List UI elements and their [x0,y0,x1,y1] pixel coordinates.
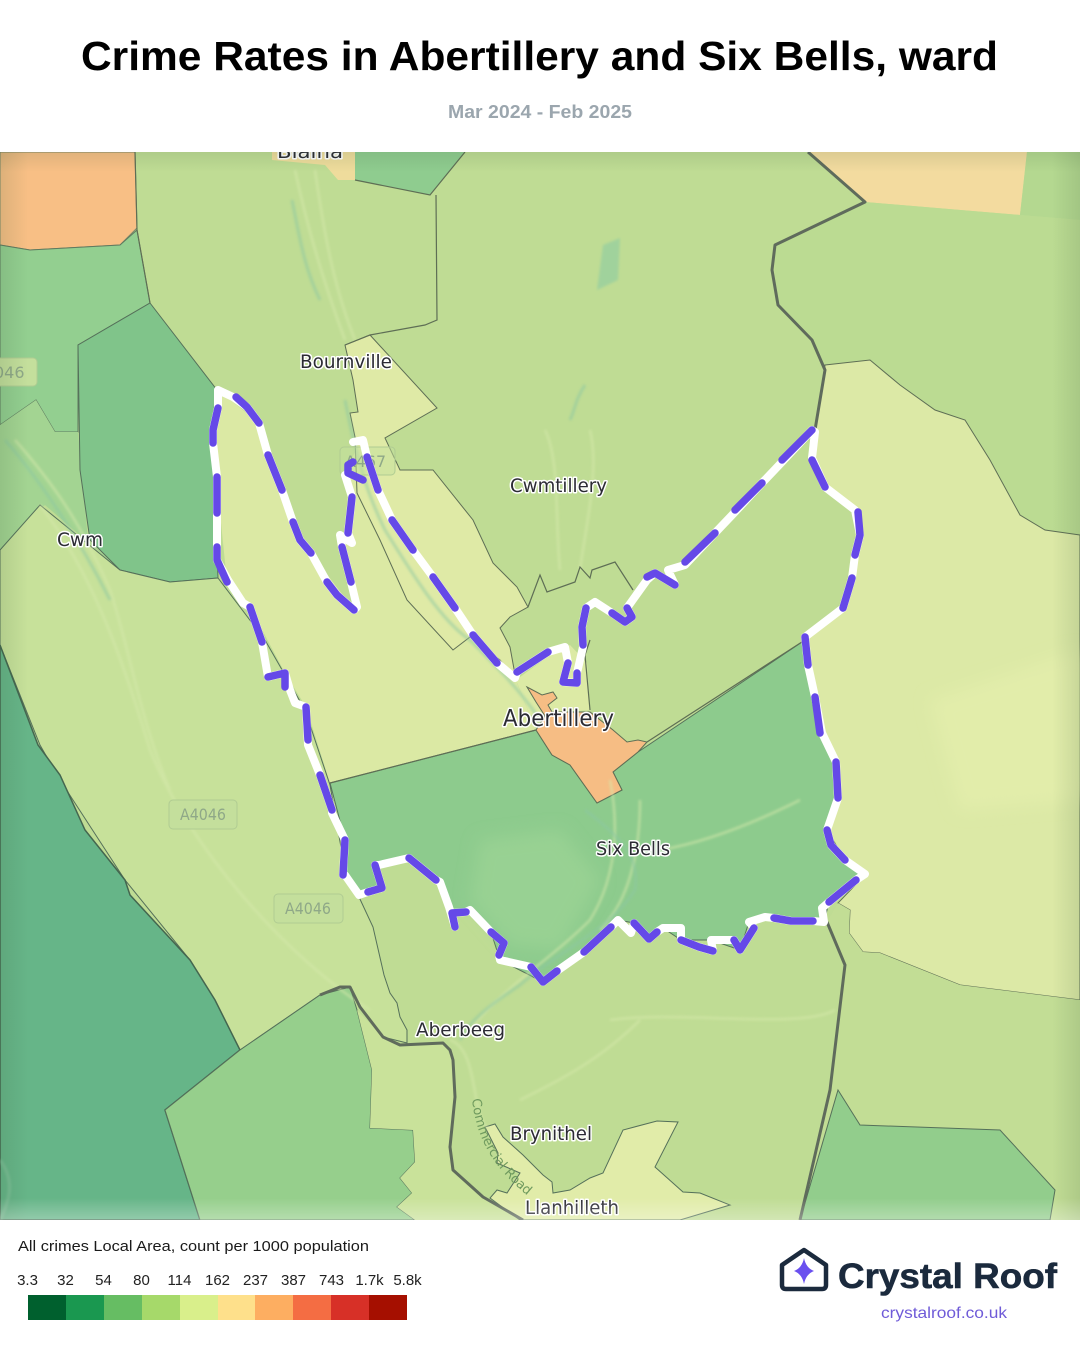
logo url: crystalroof.co.uk [881,1305,1008,1322]
legend scale values [17,1272,422,1289]
legend colour swatches [28,1295,407,1320]
region: ward north pale area [213,390,536,783]
pond [597,238,620,290]
place label: Bournville: Bournville [300,351,392,373]
road badge: A467: A467 [345,452,386,471]
road badge: A4046 north: A4046 [180,805,226,824]
road badge: A467 [340,447,395,475]
place label: Llanhilleth: Llanhilleth [525,1197,619,1219]
region: top-right beige [808,152,1027,215]
region: Cwm valley band [0,505,407,1050]
region: top-right green [1020,152,1080,220]
white ward outline [213,390,865,982]
place label: Cwm: Cwm [57,529,103,551]
street and valley texture [15,170,835,1130]
place label: Abertillery: Abertillery [503,706,614,732]
region: south-west mid green area [165,987,415,1220]
legend scale values: 1.7k [355,1272,384,1289]
road badge: A4046 north [169,800,237,829]
title: Crime Rates in Abertillery and Six Bells, ward [81,33,998,79]
region: Abertillery orange town centre [527,687,647,803]
place label: Brynithel: Brynithel [510,1123,592,1145]
legend scale values: 237 [243,1272,268,1289]
map edge vignette [0,152,1080,1220]
thin boundaries [135,152,805,783]
region: ward south green [330,640,865,982]
purple ward dashes [213,397,860,982]
legend scale values: 5.8k [393,1272,422,1289]
region: south-east mid green [800,1090,1055,1220]
region: east lighter patch [1080,644,1081,809]
region: valley yellow strip [345,335,528,680]
region: east pale yellow area [805,360,1080,1000]
river [0,200,636,1220]
legend scale values: 32 [57,1272,74,1289]
logo wordmark: Crystal Roof [838,1257,1057,1296]
legend scale values: 387 [281,1272,306,1289]
legend scale values: 114 [168,1272,191,1289]
region: top mid green [355,152,465,195]
legend scale values: 80 [133,1272,150,1289]
region: south-east green [838,903,1080,1000]
region: ward south lighter slope [477,837,590,944]
road badge: A4046 south [274,894,343,923]
region: Abertillery centre pale [516,645,590,715]
legend [17,1238,422,1320]
region: north-east green [866,202,1020,215]
logo [782,1250,1057,1322]
legend scale values: 743 [319,1272,344,1289]
place label: Six Bells: Six Bells [596,838,670,860]
legend scale values: 162 [205,1272,230,1289]
icon: house with star [782,1250,826,1289]
legend title: All crimes Local Area, count per 1000 population [18,1238,369,1255]
place label: Blaina: Blaina [277,141,343,163]
road label: Commercial Road: Commercial Road [472,1099,533,1195]
region: Cwm side green area [78,303,218,582]
subtitle: Mar 2024 - Feb 2025 [448,102,632,122]
region: Blaina beige [272,152,355,180]
legend scale values: 3.3 [17,1272,38,1289]
region: Aberbeeg west [357,1010,504,1220]
road badge: 046 [0,358,37,386]
region: north-west green area [0,230,150,432]
region: south-west dark green area [0,645,240,1220]
place label: Aberbeeg: Aberbeeg [416,1019,505,1041]
county boundary lines [320,152,865,1220]
legend scale values: 54 [95,1272,112,1289]
region: top-left orange area [0,152,137,250]
map [0,152,1080,1220]
ward boundary [213,390,865,982]
region: west green strip [0,400,112,562]
region: Llanhilleth yellow area [485,1121,730,1220]
place label: Cwmtillery: Cwmtillery [510,475,607,497]
road badge: A4046 south: A4046 [285,899,331,918]
